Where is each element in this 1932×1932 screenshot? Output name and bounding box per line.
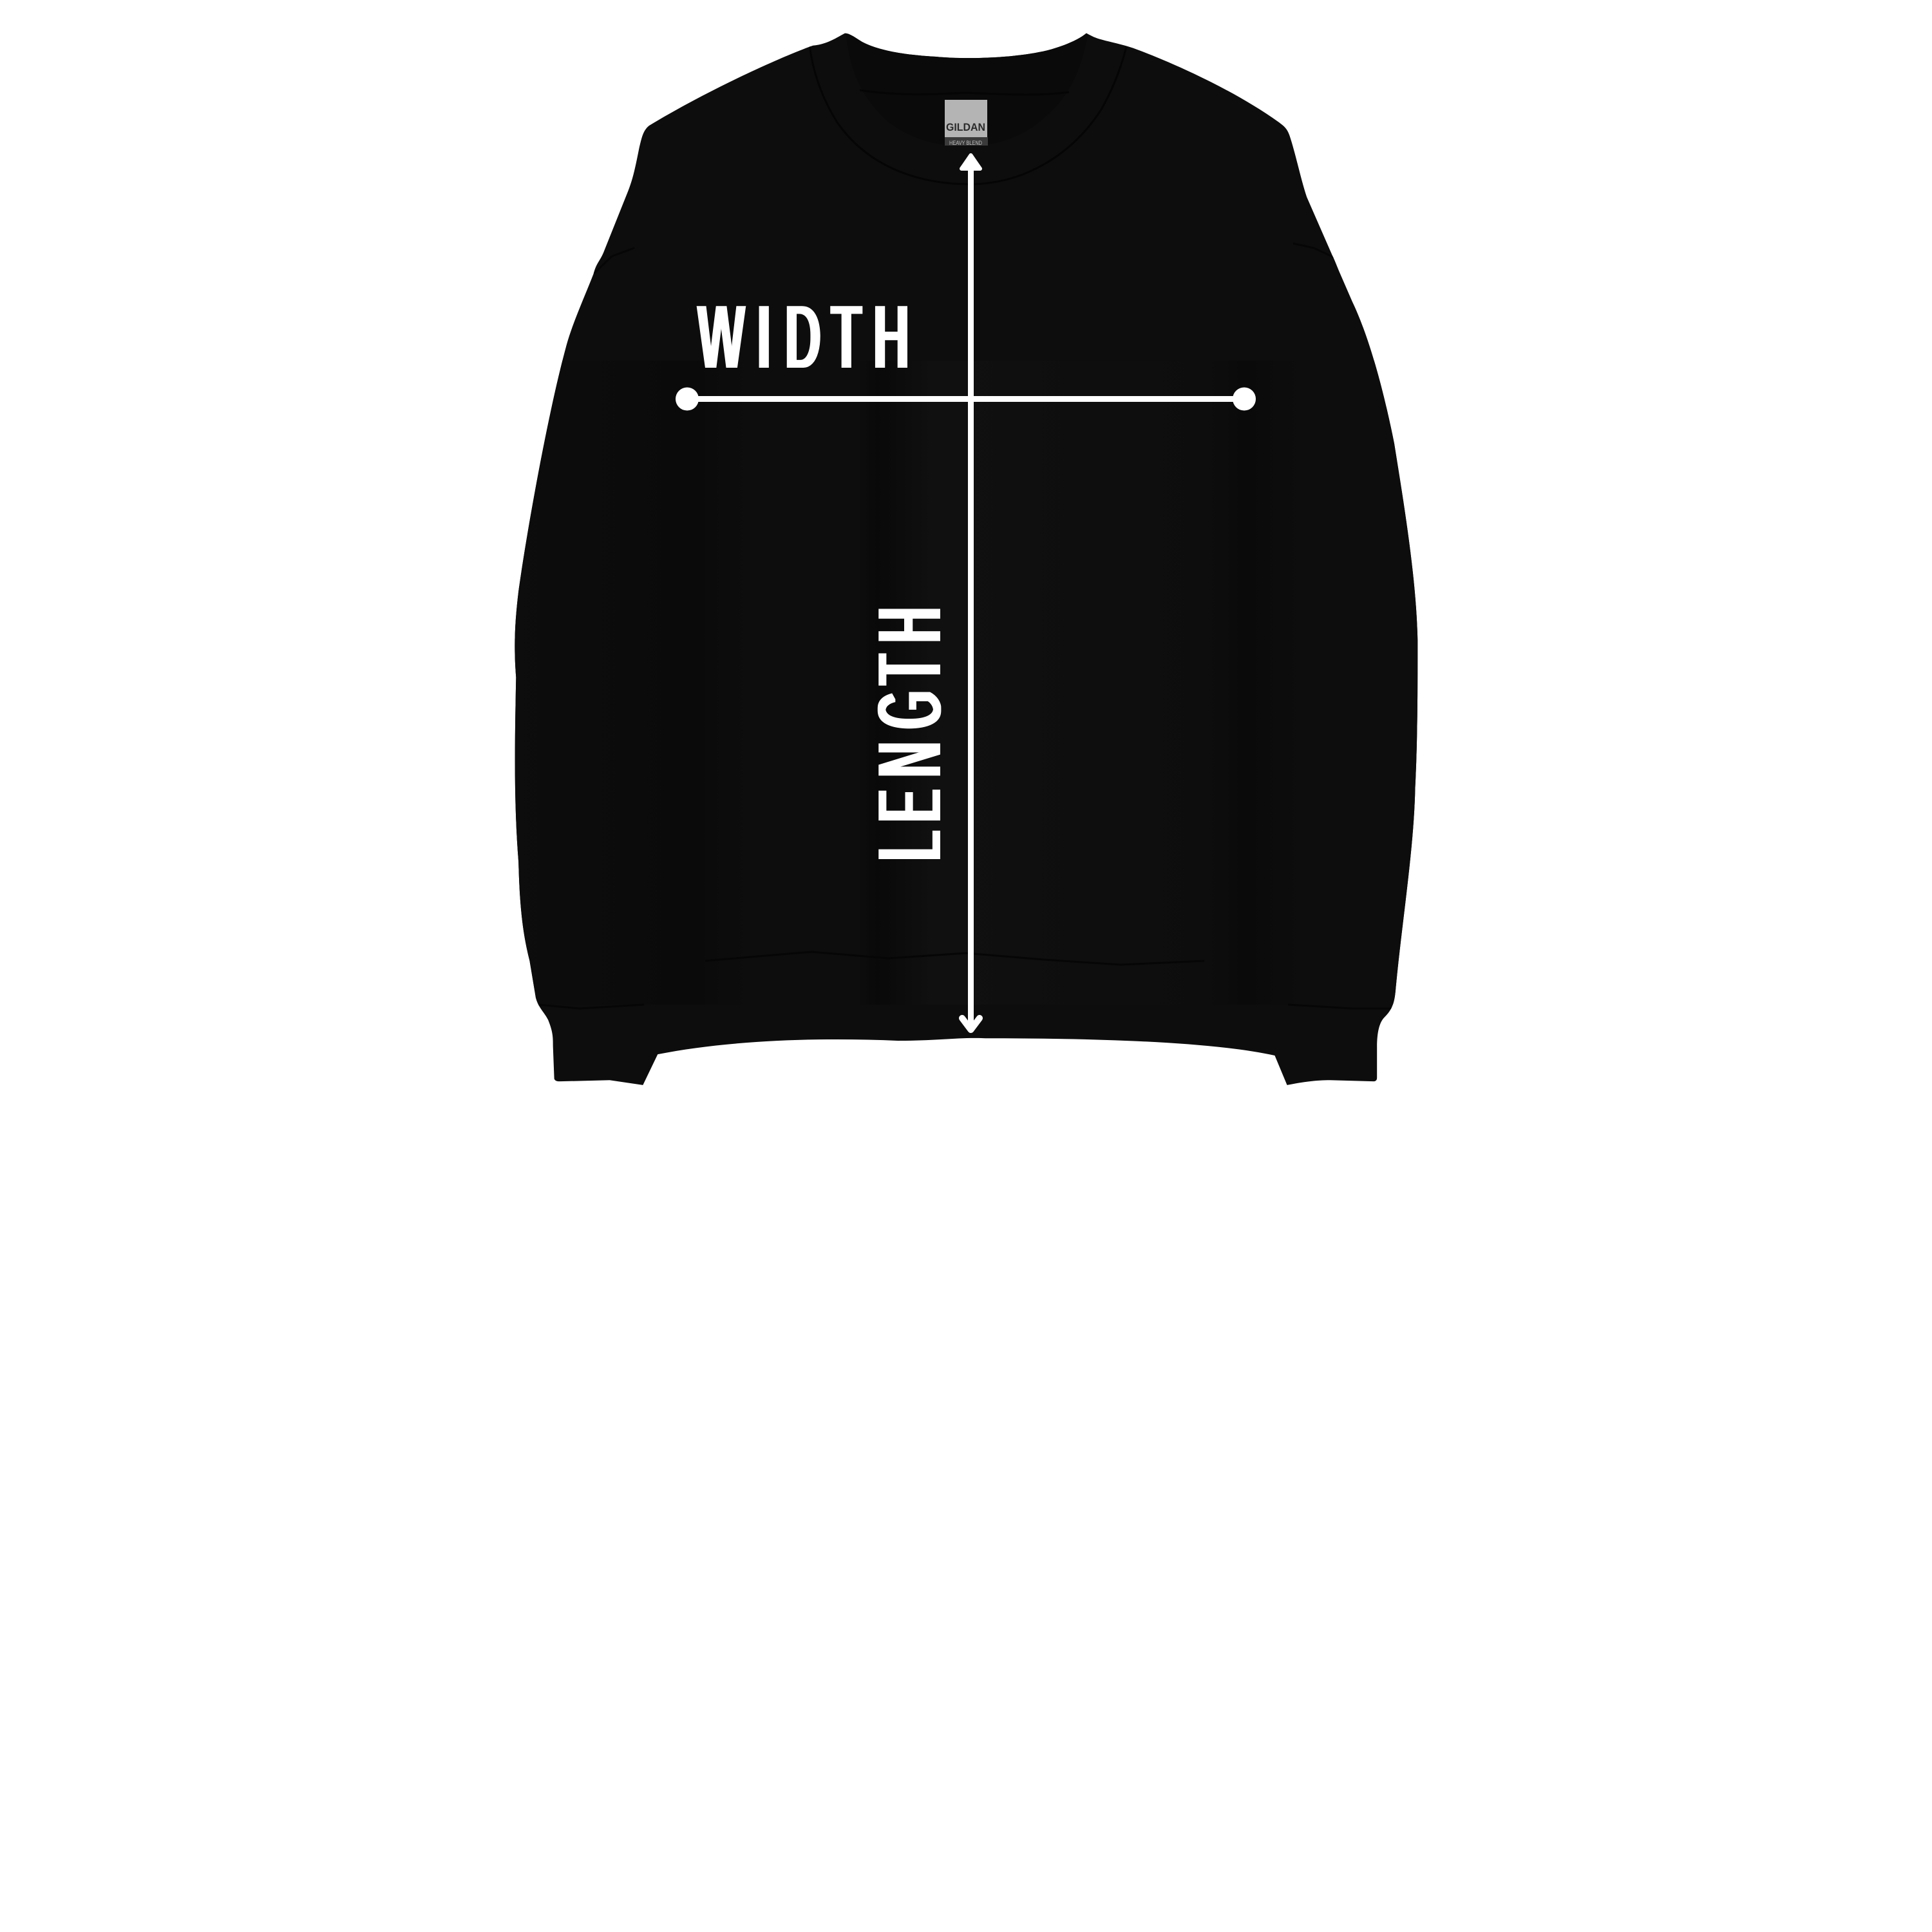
collar seams <box>810 45 1126 184</box>
arrow head: bottom <box>962 1018 980 1030</box>
label panel <box>945 100 987 137</box>
width measure line <box>676 388 1256 411</box>
back neck interior <box>846 33 1088 58</box>
size guide diagram <box>515 33 1418 1085</box>
length label: LENGTH <box>857 607 961 861</box>
length arrow <box>961 155 980 1030</box>
label style: HEAVY BLEND <box>949 140 982 147</box>
arrow shaft <box>968 167 974 1029</box>
arrow head: top <box>961 155 980 169</box>
label brand: GILDAN <box>946 121 985 133</box>
sleeve, hem and cuff seams <box>538 243 1392 1009</box>
sweatshirt silhouette <box>515 33 1417 1085</box>
neck label <box>945 100 988 147</box>
fabric shading and seams <box>509 26 1430 1009</box>
sweatshirt <box>509 26 1430 1085</box>
width label: WIDTH <box>697 285 909 389</box>
